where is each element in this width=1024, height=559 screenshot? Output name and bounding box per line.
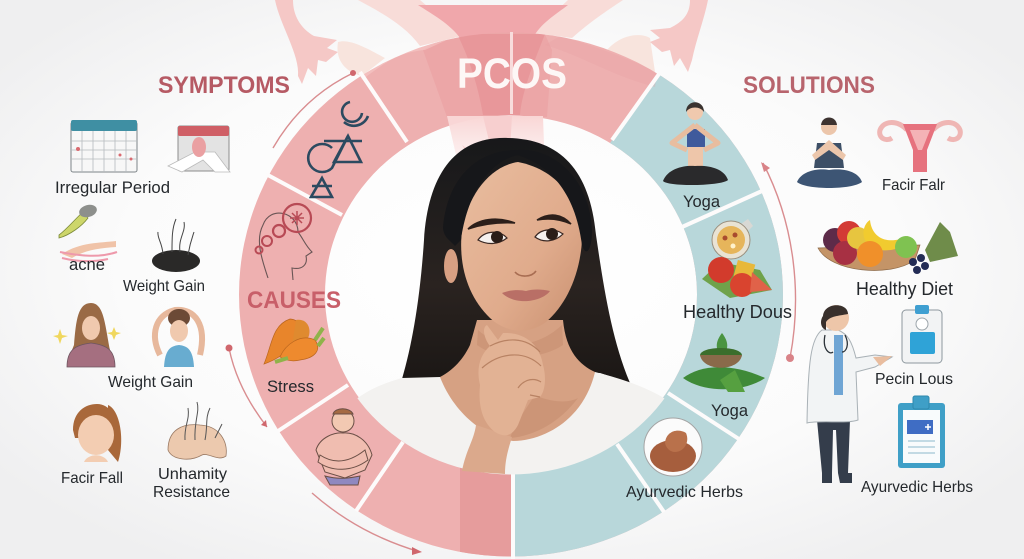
icon: calendar [71,120,137,172]
icon: carrots [264,319,324,364]
icon: uterus [880,122,960,172]
arrow: top left [273,70,356,148]
icon: doctor [807,305,892,483]
central woman portrait [355,138,670,480]
pink half: symptoms and causes [230,20,790,559]
arrow: bottom [312,493,422,555]
segment dividers [266,32,762,559]
teal half: solutions [515,76,783,556]
label: weight gain 2: Weight Gain [108,374,193,391]
icon: blue badge [902,305,942,363]
icon: medical clipboard [898,396,945,468]
symptoms list [53,120,230,501]
icon: calendar with hands [168,126,230,172]
solutions segment icons [626,102,792,501]
ring colours [239,34,783,556]
icon: fruit bowl [818,220,958,274]
heading: symptoms: SYMPTOMS [158,72,290,99]
icon: ayurvedic herbs plate [644,418,702,476]
cervix tint [447,116,545,172]
neck [440,320,595,441]
causes segment icons [256,102,372,485]
uterus illustration behind title [275,0,708,84]
icon: scalp and hair [168,402,226,459]
label: unhamity resistance: Unhamity [158,466,227,483]
heading: causes: CAUSES [247,287,341,314]
icon: person hugging [316,409,372,485]
label: yoga: Yoga [683,192,721,211]
label: healthy dous: Healthy Dous [683,302,792,322]
label: unhamity resistance: Resistance [153,484,230,501]
icon: acne [59,203,117,261]
icon: face with ponytail [73,404,121,462]
icon: herb bowl [683,333,765,392]
icon: meditating woman [797,118,862,188]
solutions list [797,118,973,496]
icon: head with gears [256,204,312,280]
label: weight gain: Weight Gain [123,278,205,295]
label: acne: acne [69,255,105,274]
facial features [468,215,571,301]
label: facir falr: Facir Falr [882,177,946,194]
icon: woman with arms raised [155,309,202,367]
icon: hair loss [152,219,200,272]
icon: yoga pose [663,102,728,185]
circular PCOS wheel [239,32,783,559]
label: healthy diet: Healthy Diet [856,279,953,299]
front hair [443,150,518,246]
icon: woman with sparkles [53,303,121,367]
icon: bowl and vegetables [702,219,772,298]
cervix centre column [462,116,512,158]
label: yoga 2: Yoga [711,401,749,420]
arrow: right [761,162,796,362]
label: irregular period: Irregular Period [55,178,170,197]
arrow: left [226,344,267,427]
label: unhamity resistance [153,466,230,501]
icon: hormone symbols [308,102,368,197]
hand under chin [462,325,545,474]
label: ayurvedic herbs: Ayurvedic Herbs [626,484,743,501]
heading: solutions: SOLUTIONS [743,72,875,99]
uterus tint inside ring [423,30,552,117]
label: stress: Stress [267,377,314,396]
white t-shirt [355,372,670,480]
label: facir fall: Facir Fall [61,470,123,487]
title: PCOS: PCOS [457,50,567,98]
label: pecin lous: Pecin Lous [875,371,953,388]
bottom shading [460,468,511,556]
face [461,162,582,331]
label: ayurvedic herbs 2: Ayurvedic Herbs [861,479,973,496]
